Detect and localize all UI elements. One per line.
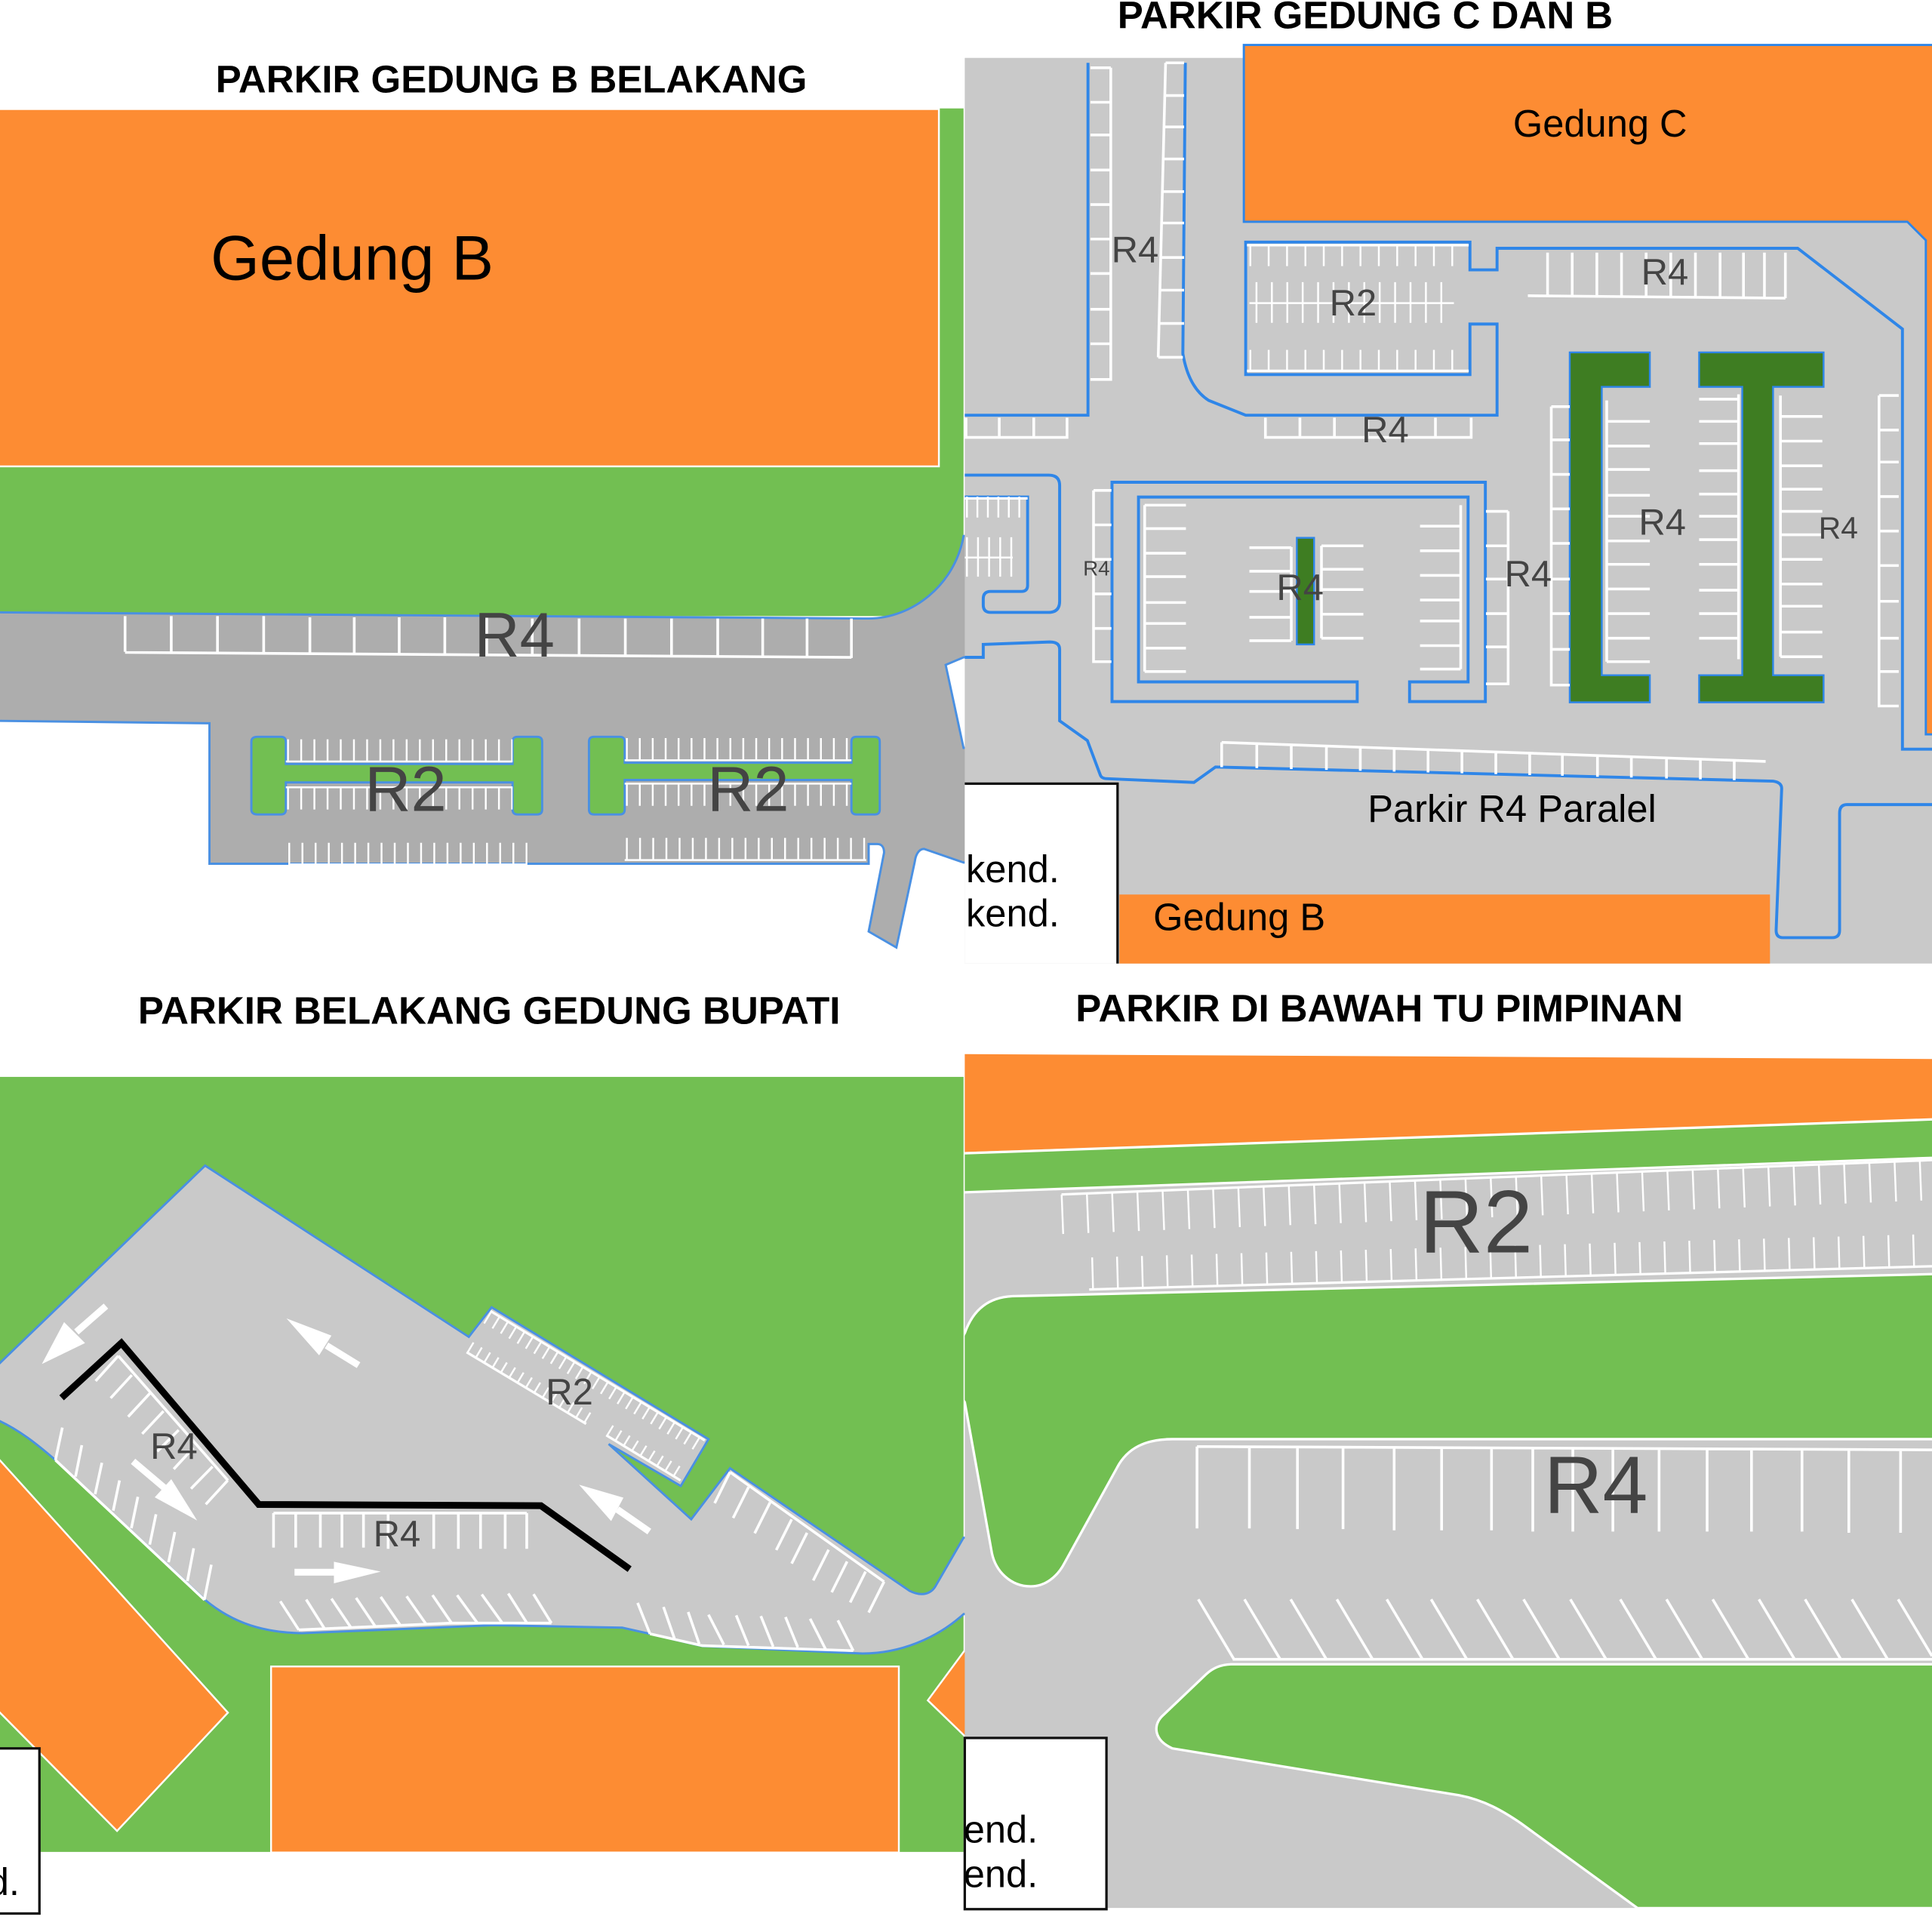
arrow: top left: [42, 1306, 106, 1364]
planter: C shape: [1570, 352, 1650, 703]
legend text: end.: [964, 1808, 1038, 1851]
building edge: [964, 1119, 1932, 1153]
R2 stalls: [964, 245, 1469, 558]
R2 stalls: [466, 1311, 705, 1481]
label: Gedung B: Gedung B: [211, 223, 494, 294]
building: left: [0, 1457, 228, 1831]
planter: center: [1297, 538, 1314, 645]
label: R4 labels: R4: [1819, 510, 1858, 545]
arrow: right: [294, 1561, 380, 1583]
panel: parkir gedung B belakang: [0, 57, 968, 948]
lawn island: lower: [1156, 1664, 1932, 1908]
label: R2: R2: [1420, 1173, 1533, 1272]
R4 stalls: upper row: [1197, 1447, 1932, 1533]
legend box: [0, 1749, 39, 1914]
legend text: kend.: [966, 892, 1060, 935]
label: R4 center: R4: [374, 1514, 420, 1555]
R4 stalls: [55, 1356, 884, 1651]
planter: I shape: [1699, 352, 1823, 703]
island: right: [589, 737, 880, 814]
label: R4: R4: [1544, 1439, 1647, 1531]
label: Parkir R4 Paralel: Parkir R4 Paralel: [1367, 787, 1657, 830]
building: center: [271, 1666, 899, 1853]
label: Gedung C: Gedung C: [1513, 102, 1687, 145]
R4 stalls: angled row: [1198, 1599, 1932, 1660]
R4 parking stalls: [125, 616, 851, 658]
R2 stalls: upper row: [1062, 1160, 1932, 1214]
title: PARKIR BELAKANG GEDUNG BUPATI: [138, 989, 840, 1032]
legend box: [964, 1738, 1106, 1909]
legend text: [964, 1808, 1038, 1895]
boundary lines: [964, 63, 1932, 937]
panel: parkir di bawah TU pimpinan: [958, 986, 1932, 1909]
label: R4 labels: R4: [1361, 410, 1409, 451]
paved area: [964, 58, 1932, 964]
label: R4 left: R4: [150, 1426, 198, 1467]
building: gedung B: [1119, 894, 1770, 964]
building: gedung C: [1244, 45, 1932, 734]
paved area: [0, 1165, 968, 1654]
panel: parkir gedung C dan B: [964, 0, 1932, 964]
arrow: lower left: [133, 1461, 197, 1521]
label: R4 labels: R4: [1641, 252, 1688, 293]
road area: [0, 536, 968, 948]
label: R4 labels: R4: [1504, 554, 1552, 595]
island: left: [251, 737, 542, 814]
label: R4: R4: [475, 600, 555, 670]
lawn: [0, 109, 964, 616]
title: PARKIR GEDUNG B BELAKANG: [216, 57, 807, 100]
R2 parking stalls: [286, 749, 866, 864]
label: R2 left: R2: [365, 752, 447, 824]
R2 stalls: lower row: [1089, 1250, 1932, 1290]
title: PARKIR DI BAWAH TU PIMPINAN: [1075, 986, 1683, 1029]
label: R2: R2: [1330, 283, 1377, 324]
label: Gedung B: Gedung B: [1153, 896, 1325, 939]
parallel R4 stalls: [1222, 743, 1766, 780]
panel: parkir belakang gedung bupati: [0, 989, 968, 1914]
building: right: [928, 1648, 966, 1737]
paved area: [964, 1158, 1932, 1908]
road edge: [964, 1158, 1932, 1192]
label: R4 labels: R4: [1276, 568, 1324, 608]
arrow: center: [287, 1318, 358, 1365]
barrier line: [62, 1343, 629, 1569]
arrow: near R2: [579, 1484, 649, 1531]
label: R4 labels: R4: [1638, 503, 1686, 543]
legend box: [964, 783, 1118, 964]
label: R2: R2: [546, 1372, 593, 1413]
lawn island: middle: [958, 1274, 1932, 1586]
lawn strip: [964, 1118, 1932, 1192]
label: R4 labels: R4: [1083, 556, 1110, 580]
label: R4 labels: [1083, 230, 1858, 608]
legend text: end.: [964, 1852, 1038, 1895]
building: [964, 1054, 1932, 1152]
lawn: [0, 1077, 964, 1852]
R4 stalls: [966, 63, 1899, 706]
legend text: [966, 848, 1060, 935]
label: R2 right: R2: [707, 752, 789, 824]
legend text: kend.: [966, 848, 1060, 891]
building: gedung B: [0, 109, 939, 466]
label: R4 labels: R4: [1112, 230, 1158, 271]
